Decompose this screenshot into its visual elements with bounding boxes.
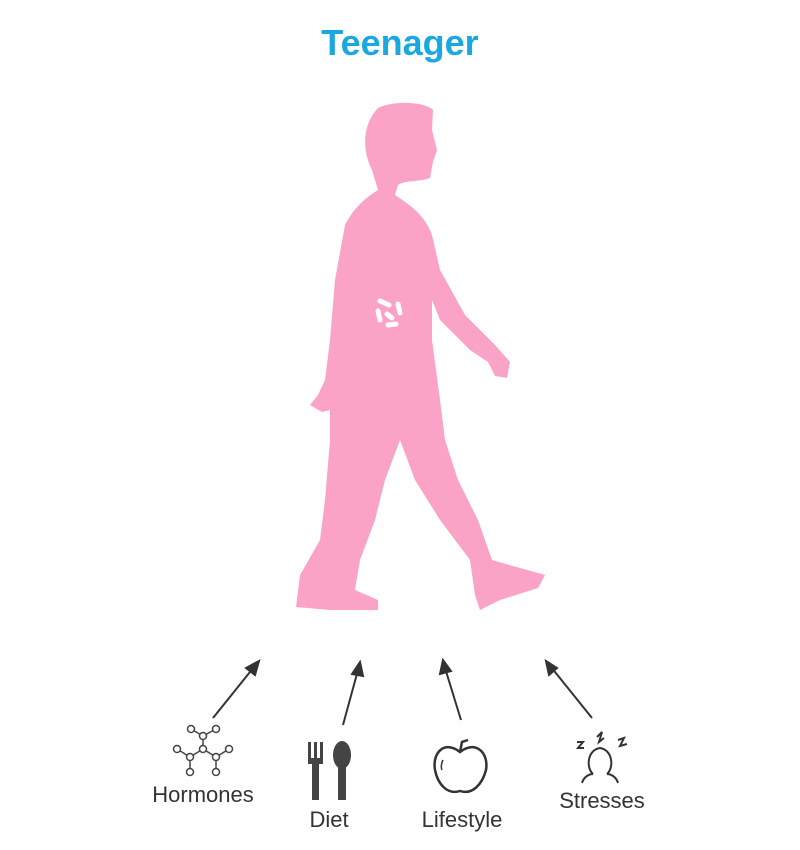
label: Diet: Diet (309, 807, 349, 832)
icon: apple (435, 740, 486, 792)
silhouette (296, 103, 545, 610)
icon: hormones molecule (174, 726, 232, 776)
arrows (213, 660, 592, 725)
icon: stressed head (577, 732, 627, 783)
icon: fork and spoon (308, 741, 351, 800)
label: Hormones: Hormones (152, 782, 254, 807)
label: Stresses: Stresses (559, 788, 645, 813)
label: Lifestyle: Lifestyle (422, 807, 502, 832)
title: Teenager (321, 22, 479, 63)
icon: gut bacteria (378, 301, 400, 325)
